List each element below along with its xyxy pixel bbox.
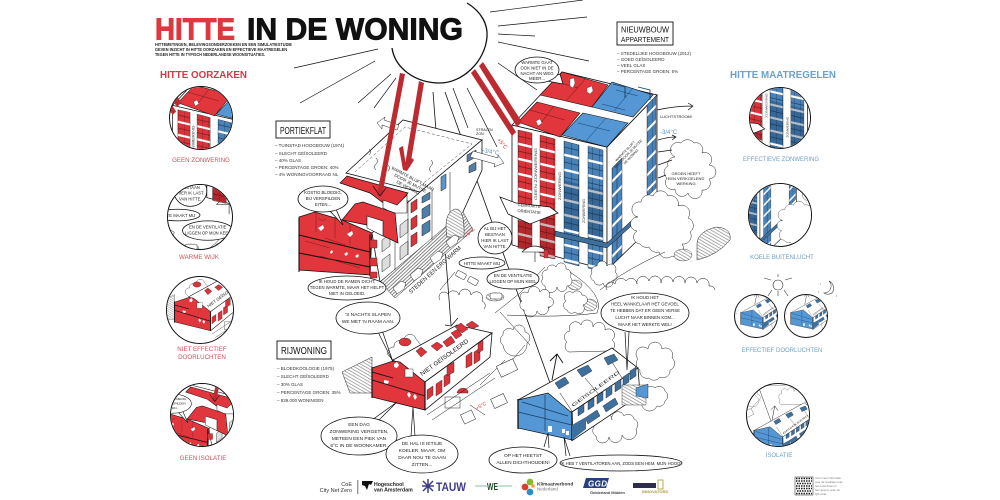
icon: qr code: [795, 477, 813, 495]
tree beside tall building: [664, 140, 716, 199]
bubble: heel wankelaar: TE HEBBEN DAT ER GEEN VERSE: [610, 308, 680, 313]
logo: klimaatverbond: Klimaatverbond: [537, 482, 573, 488]
panel: nieuwbouw facts: [617, 22, 692, 74]
circle: koele buitenlucht: [748, 183, 812, 247]
airflow labels tall building: WERKING: [676, 181, 696, 186]
bubble: heel wankelaar: MAAR HET WERKTE WEL!: [618, 322, 672, 327]
circle: doorluchten overdag: [734, 294, 778, 338]
portiek hatched street: [380, 212, 473, 298]
bubble: ventilatie: LIGGEN OP MIJN KEEL: [490, 279, 537, 284]
logo: city net zero: [320, 480, 358, 494]
portiek facade windows: [382, 150, 476, 272]
front windows blue: [564, 141, 579, 266]
heading: hitte oorzaken: HITTE OORZAKEN: [160, 69, 247, 81]
bubble: de hal: ZITTEN...: [412, 462, 432, 468]
subtitle text block: TEGEN HITTE IN TYPISCH NEDERLANDSE WOONSITUATIES.: [155, 52, 265, 57]
cause labels: NIET EFFECTIEF: [177, 346, 227, 353]
pillar labels: [534, 148, 586, 223]
nieuwbouw bullet list: – VEEL GLAS: [617, 63, 645, 68]
bubble: kostig: EITEN...: [315, 202, 331, 207]
sun and rays: [294, 0, 589, 383]
bubble: zonwering vergeten: EEN DAG: [348, 422, 370, 428]
heading: hitte maatregelen: HITTE MAATREGELEN: [730, 69, 836, 81]
icon: moon: [818, 281, 837, 296]
portiekflat bullet list: – SLECHT GEÏSOLEERD: [275, 150, 328, 156]
front windows red: [518, 130, 532, 251]
nieuwbouw bullet list: [617, 51, 692, 74]
rijwoning bullet list: – SLECHT GEÏSOLEERD: [277, 373, 330, 379]
rijwoning bullet list: – BLOEDKOOLOGIE (1975): [277, 366, 335, 371]
qr note text: QR-code.: [815, 492, 827, 496]
qr note text: het rapport, scan de: [815, 488, 840, 492]
blue row label: GEÏSOLEERD: [570, 368, 622, 408]
icon: sun: [764, 274, 792, 296]
measure labels: EFFECTIEF DOORLUCHTEN: [742, 348, 822, 354]
portiek roof note: DE WONING: [396, 179, 421, 196]
cause labels: GEEN ZONWERING: [172, 157, 230, 164]
right facade windows: [612, 158, 622, 265]
ribbon: gebruikte orientatie: ORIËNTATIE: [517, 208, 541, 215]
bubble: kostig: [298, 186, 348, 225]
circle: geen zonwering: [169, 86, 233, 150]
label: niet geisoleerd: NIET GEÏSOLEERD: [419, 337, 471, 378]
title: IN DE WONING: [247, 12, 463, 46]
portiek cars and street label: STEDEN EEN ERG WARM: [408, 246, 463, 295]
speech bubbles: [298, 57, 689, 473]
bubble: ramen dicht: TEGEN WARMTE, MAAR HET HELPT: [310, 285, 385, 290]
bubble: warmte gaat: OOK NIET IN DE: [520, 66, 554, 70]
logo: we: WE: [487, 482, 498, 493]
pillar labels: ZONWERING: [558, 172, 562, 200]
red row yard: +5°C: [475, 401, 488, 412]
qr note text: [815, 476, 843, 496]
portiek airflow arrows: -3/4°C: [482, 148, 500, 157]
paths and parked cars: [440, 252, 665, 385]
bubble: de hal: DAAR NOU TE GAAN: [398, 455, 446, 461]
trees and surroundings: [439, 140, 730, 443]
bubble: warmte gaat: [515, 57, 563, 84]
bubble: zonwering vergeten: METEEN EEN PIEK VAN: [332, 436, 387, 442]
qr note text: over de resultaten van: [815, 480, 843, 484]
bubble: zonwering vergeten: ZONWERING VERGETEN,: [330, 429, 388, 435]
portiek roof note: WARMTE BLIJFT MAAR: [391, 165, 435, 192]
nieuwbouw bullet list: – PERCENTAGE GROEN: 5%: [617, 69, 678, 74]
logo: hogeschool van amsterdam: [362, 481, 413, 494]
ribbon: gebruikte orientatie: GEBRUIKTE: [517, 202, 541, 209]
bubble: al bij het bestaan: AL BIJ HET: [484, 226, 507, 231]
ribbon: gebruikte orientatie: [500, 197, 558, 224]
bubble: ventilatie: [487, 269, 539, 289]
logo: ggd: [583, 478, 626, 495]
bubble: al bij het bestaan: [478, 222, 512, 254]
logo: tauw: TAUW: [436, 480, 467, 494]
rijwoning red row house: [342, 321, 495, 420]
bubble: op het heetst: ALLEN DICHTHOUDEN!: [496, 460, 550, 466]
solar rays red: [373, 62, 522, 196]
logo: tauw: [422, 479, 467, 494]
bubble: de hal: KOELER, MAAR, OM: [399, 448, 445, 454]
nieuwbouw tall building: [500, 72, 657, 272]
red row dormers: [399, 321, 483, 400]
hatched shrubs: [697, 227, 730, 260]
blue row roof: [518, 348, 638, 412]
airflow labels tall building: EEN VERKOELEND: [668, 176, 704, 181]
bubble: ramen dicht: IK HOUD DE RAMEN DICHT,: [319, 279, 375, 284]
umbrella on terrace: [522, 246, 548, 262]
bubble: al bij het bestaan: BESTAAN: [485, 232, 505, 237]
measure labels: KOELE BUITENLUCHT: [750, 255, 814, 261]
bubble: heel wankelaar: [601, 293, 689, 370]
tall building roof base: [512, 72, 657, 147]
circle: isolatie: [746, 383, 810, 447]
qr note text: Voor meer informatie: [815, 476, 841, 480]
bubble: heel wankelaar: IK HOUD HET: [631, 295, 659, 300]
panel: rijwoning facts: [277, 341, 341, 403]
portiek red floors: [299, 176, 408, 278]
bubble: ventilatoren: IK HEB 7 VENTILATOREN AAN, ZODS EEN HEM, MIJN HOOG!: [560, 461, 682, 466]
cause labels: GEEN ISOLATIE: [180, 455, 226, 462]
red row gable: [372, 361, 425, 410]
circle: warme wijk: [167, 184, 233, 250]
circle: niet effectief doorluchten: [166, 276, 234, 344]
bubble: al bij het bestaan: VAN HITTE.: [483, 244, 507, 249]
rijwoning bullet list: [277, 366, 341, 403]
rijwoning heading: RIJWONING: [281, 346, 327, 357]
bubble: de hal: DE HAL IS IETSJE: [402, 441, 442, 447]
bubble: warmte gaat: NACHT AN WEG: [520, 71, 554, 76]
logo: city net zero: CoE: [341, 482, 352, 488]
blue canopy: [555, 213, 640, 248]
airflow labels tall building: GROEN HEEFT: [672, 171, 701, 176]
red row fence: [342, 357, 372, 393]
tall building walls: [512, 125, 607, 270]
rijwoning bullet list: – 30% GLAS: [277, 382, 303, 387]
logo: innovators: [633, 480, 668, 494]
bubble: kostig: KOSTIG BLOEDIG,: [304, 190, 342, 195]
logo: city net zero: City Net Zero: [320, 488, 352, 494]
portiek roof: [346, 120, 482, 192]
bubble: zonwering vergeten: 6°C IN DE WOONKAMER.: [330, 443, 388, 449]
cause labels: DOORLUCHTEN: [178, 354, 226, 361]
blue row side windows: [578, 367, 636, 424]
bubble: ventilatie: EN DE VENTILATIE: [494, 273, 532, 278]
portiek cars and street label: +5°C: [463, 227, 477, 239]
nieuwbouw bullet list: – GOED GEÏSOLEERD: [617, 56, 665, 62]
portiekflat bullet list: – 40% GLAS: [275, 158, 301, 163]
logo: klimaatverbond: [522, 479, 573, 495]
airflow labels tall building: -3/4°C: [660, 130, 678, 136]
logo: we: [475, 482, 512, 493]
big white tree: [630, 191, 693, 258]
bubble: ventilatoren: [560, 437, 682, 471]
qr code and note: [795, 476, 843, 496]
rijwoning bullet list: – 839.000 WONINGEN: [277, 398, 324, 403]
subtitle text block: [155, 42, 292, 57]
portiek airflow arrows: [377, 117, 508, 167]
blue row gable: [518, 393, 586, 441]
qr note text: het onderzoek en: [815, 484, 837, 488]
measure labels: EFFECTIEVE ZONWERING: [743, 157, 819, 163]
logo: ggd: Gelderland Midden: [590, 490, 626, 495]
logo row: [320, 478, 668, 495]
blue roof rooms: [562, 82, 653, 147]
title: [155, 12, 463, 46]
bubble: de hal: [386, 407, 458, 473]
nieuwbouw heading: NIEUWBOUW: [621, 24, 669, 34]
portiek airflow arrows: STRALEN: [476, 128, 493, 132]
circle: doorluchten nacht: [784, 294, 828, 338]
subtitle text block: HITTEMETINGEN, BELEVINGSONDERZOEKEN EN EEN SIMULATIESTUDIE: [155, 42, 292, 47]
portiekflat building: [299, 117, 508, 298]
bubble: nachts slapen: WE MET 'N RAAM AAN.: [342, 319, 394, 325]
logo: hogeschool van amsterdam: Hogeschool: [374, 482, 404, 488]
title: HITTE: [155, 12, 235, 46]
logo: ggd: GGD: [588, 480, 607, 488]
panel: portiekflat facts: [275, 121, 345, 177]
portiekflat bullet list: – TUINSTAD HOOGBOUW (1974): [275, 143, 345, 148]
blue row garden shed: [622, 385, 646, 405]
cause labels: [172, 157, 230, 462]
logo: innovators: INNOVATORS: [642, 489, 668, 494]
bubble: kostig: BIJ VERSPILDEN: [306, 196, 340, 201]
logo: klimaatverbond: Nederland: [537, 486, 558, 492]
upward heat arrow: [550, 354, 563, 380]
right facade note: DE WONING: [623, 148, 640, 165]
middle trees: [542, 263, 572, 293]
bubble: ramen dicht: [308, 276, 386, 300]
portiek tree arch: [446, 209, 464, 237]
portiekflat bullet list: – PERCENTAGE GROEN: 40%: [275, 165, 339, 170]
red roof rooms: [518, 72, 608, 137]
bubble: nachts slapen: [336, 302, 400, 362]
portiek cars and street label: [393, 227, 477, 295]
red row side wall: [425, 333, 492, 410]
circle: geen isolatie: [170, 383, 234, 447]
blue row skylights: [555, 354, 618, 389]
portiekflat bullet list: [275, 143, 345, 177]
portiek side facade: [372, 140, 482, 282]
blue row side wall: [572, 368, 640, 440]
portiekflat heading: PORTIEKFLAT: [280, 126, 326, 137]
cause labels: WARME WIJK: [179, 254, 220, 261]
airflow labels tall building: LUCHTSTROOM!: [660, 114, 692, 119]
measure labels: [742, 157, 822, 459]
portiek airflow arrows: ZON: [476, 132, 484, 136]
scene: illustrated housing: [294, 0, 730, 473]
bubble: ramen dicht: NIET IN GELOEID.: [329, 291, 365, 296]
warm district bubbles: [459, 222, 539, 289]
portiek roof note: DOOR JE MUTSE: [394, 173, 427, 194]
bubble: op het heetst: OP HET HEETST: [504, 453, 542, 459]
rijwoning blue row house: [518, 348, 648, 441]
bubble: op het heetst: [489, 433, 557, 473]
pillar labels: GEEN ZONWERING: [534, 148, 538, 200]
portiekflat bullet list: – 4% WONINGVOORRAAD NL: [275, 172, 339, 177]
bubble: hitte maakt: HITTE MAAKT MIJ: [464, 261, 500, 266]
bubble: warmte gaat: MEER...: [529, 76, 545, 81]
right facade note: WARMTE BLIJFT: [615, 140, 636, 162]
bubble: zonwering vergeten: [321, 402, 397, 455]
red row yard: [427, 373, 495, 420]
red row roof: [393, 325, 492, 382]
right facade note: MAAR DOOR JE MUTSE: [613, 138, 644, 169]
scalloped ground edges: [439, 276, 715, 309]
nieuwbouw heading: [617, 22, 673, 45]
subtitle text block: GEVEN INZICHT IN HITTE OORZAKEN EN EFFECTIEVE MAATREGELEN: [155, 47, 287, 52]
airflow labels tall building: [657, 103, 704, 186]
bubble: heel wankelaar: LUCHT NAAR BINNEN KOM...: [615, 315, 675, 320]
pillar labels: ZONWERING: [582, 199, 586, 223]
portiek airflow arrows: +5°C: [495, 137, 508, 151]
logo: hogeschool van amsterdam: van Amsterdam: [374, 488, 413, 494]
rijwoning bullet list: – PERCENTAGE GROEN: 35%: [277, 390, 341, 395]
bubble: heel wankelaar: HEEL WANKELAAR HET GEVOEL: [611, 302, 679, 306]
bubble: al bij het bestaan: HIER IK LAST: [481, 238, 509, 243]
nieuwbouw heading: APPARTEMENT: [621, 35, 669, 44]
bubble: nachts slapen: 'S NACHTS SLAPEN: [345, 312, 391, 318]
circle: effectieve zonwering: [749, 87, 811, 149]
bubble: warmte gaat: WARMTE GAAT: [521, 60, 553, 65]
nieuwbouw bullet list: – STEDELIJKE HOOGBOUW (2012): [617, 51, 692, 56]
measure labels: ISOLATIE: [766, 453, 792, 459]
